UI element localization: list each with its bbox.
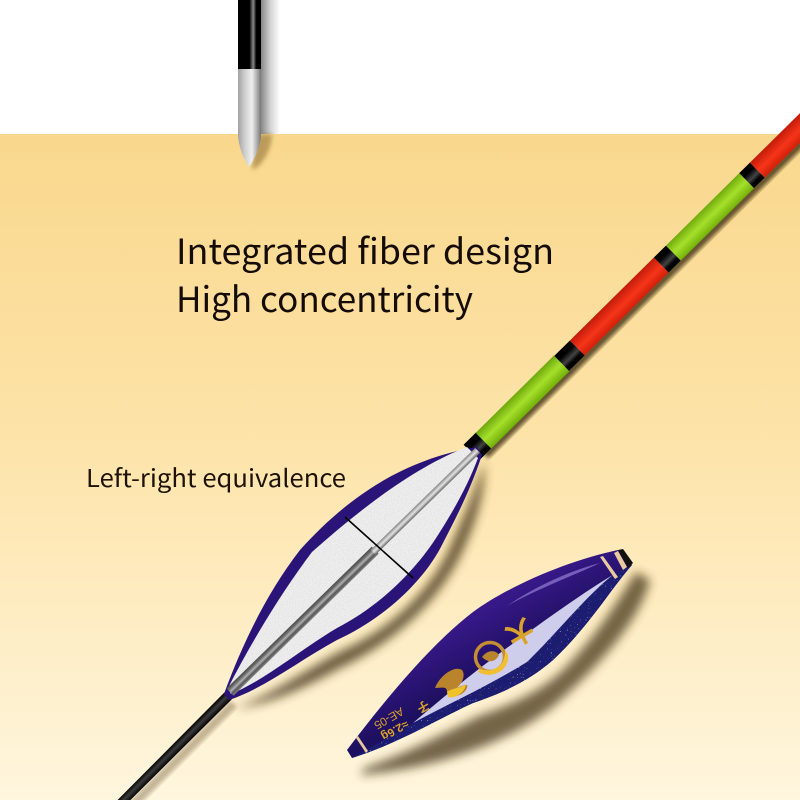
float cross-section — [224, 447, 484, 708]
gold marks: AE-05 — [372, 704, 405, 731]
left-right measure line — [345, 517, 413, 578]
lower stem — [110, 692, 238, 800]
antenna: striped sight tube — [464, 102, 800, 464]
float centre rod — [227, 447, 481, 696]
fish emblem — [435, 669, 467, 697]
gold marks: ≈2.6g — [379, 717, 410, 742]
highlight — [507, 563, 600, 606]
heading — [176, 224, 554, 323]
second float shadow — [360, 572, 650, 775]
heading: High concentricity — [176, 272, 473, 323]
gold marks: 子 — [414, 697, 433, 717]
end bands — [356, 549, 633, 753]
heading: Integrated fiber design — [176, 224, 554, 275]
lower blue side — [352, 565, 632, 758]
callout label: Left-right equivalence — [86, 460, 346, 495]
silver stripe — [413, 575, 613, 723]
icon: float tip at the top — [238, 0, 280, 170]
gold marks: 大 — [499, 610, 542, 658]
product float — [347, 549, 633, 758]
gold marks — [372, 610, 542, 742]
